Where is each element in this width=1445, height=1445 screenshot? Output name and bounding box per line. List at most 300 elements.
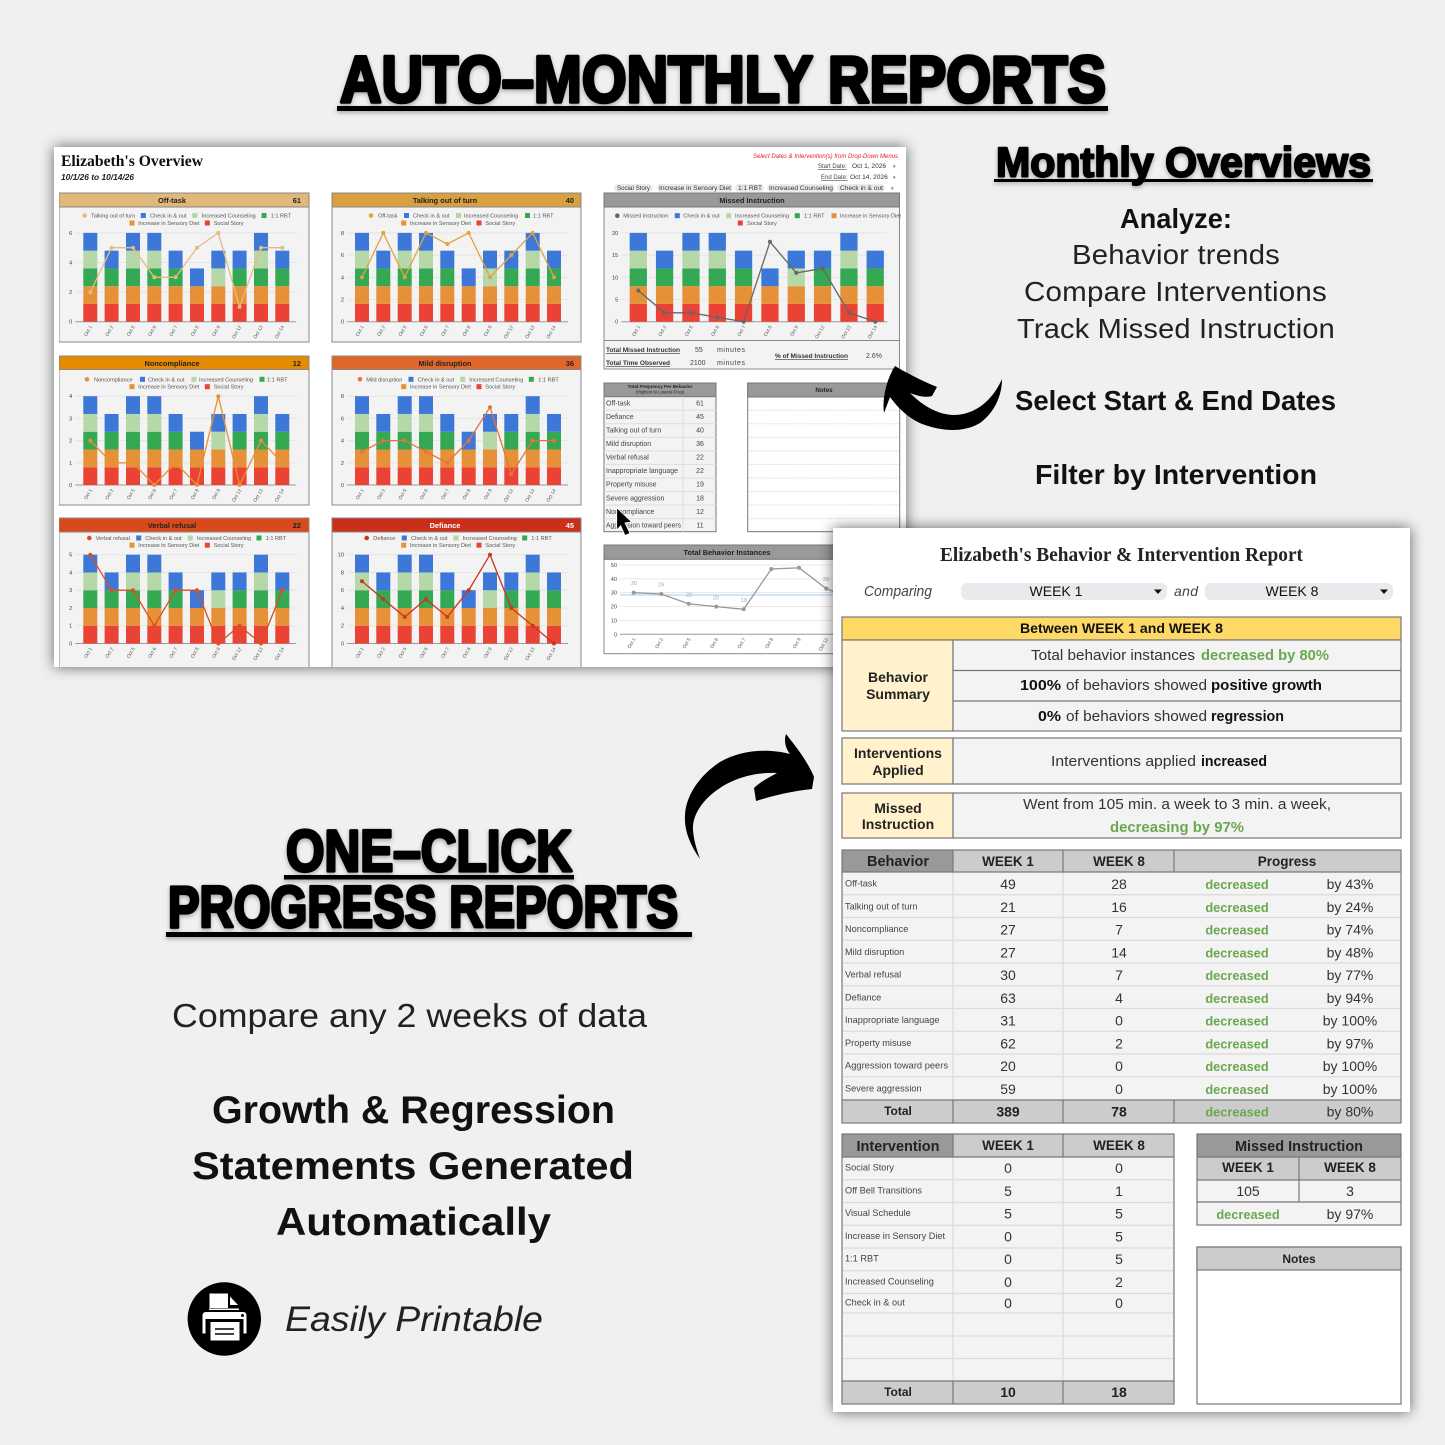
text: compare any 2 weeks: Compare any 2 weeks of data	[172, 997, 648, 1034]
text: filter by intervention: Filter by Intervention	[1035, 459, 1317, 490]
chart: total behavior instances	[604, 544, 833, 654]
date and intervention selectors: Check in & out	[840, 185, 883, 192]
table: behavior comparison: 62	[1000, 1035, 1016, 1051]
chart: defiance: Increased Counseling	[463, 536, 517, 542]
chart: talking out of turn: Talking out of turn	[413, 196, 478, 205]
chart: talking out of turn: Check in & out	[413, 214, 450, 220]
chart: defiance: Oct 7	[440, 646, 451, 659]
table: behavior comparison: 0	[1115, 1012, 1123, 1028]
table: behavior comparison: 16	[1111, 899, 1127, 915]
summary: interventions applied: Interventions	[854, 745, 942, 761]
table: behavior comparison: 21	[1000, 899, 1016, 915]
table: total frequency per behavior: Talking out of turn	[606, 428, 661, 434]
table: behavior comparison: 78	[1111, 1104, 1127, 1120]
chart: mild disruption: Increased Counseling	[469, 377, 523, 383]
table: behavior comparison: Total	[884, 1104, 912, 1118]
date and intervention selectors: ▾	[893, 164, 896, 170]
chart: noncompliance: Noncompliance	[144, 359, 200, 368]
chart: noncompliance	[59, 356, 309, 505]
missed instruction totals: Total Time Observed	[606, 360, 670, 367]
chart: missed instruction: Oct 13	[840, 324, 853, 340]
chart: talking out of turn: 6	[341, 253, 344, 259]
chart: defiance: Check in & out	[411, 536, 448, 542]
table: intervention comparison: Off Bell Transitions	[845, 1185, 922, 1195]
chart: talking out of turn: 4	[341, 275, 344, 281]
chart: mild disruption: Oct 5	[398, 488, 409, 501]
table: behavior comparison: by 100%	[1323, 1012, 1377, 1028]
table: behavior comparison: Inappropriate language	[845, 1015, 940, 1025]
table: total frequency per behavior: (Highest to Lowest Freq)	[636, 390, 685, 394]
chart: talking out of turn: 8	[341, 231, 344, 237]
chart: defiance: Oct 14	[545, 646, 558, 662]
chart: defiance: Oct 13	[524, 646, 537, 662]
summary: behavior summary: Behavior	[868, 669, 929, 685]
summary: behavior summary: 100%	[1020, 678, 1061, 694]
table: intervention comparison: 18	[1111, 1384, 1127, 1400]
chart: defiance	[332, 518, 581, 673]
chart: verbal refusal: Oct 1	[83, 646, 94, 659]
table: intervention comparison: 5	[1115, 1206, 1123, 1222]
table: behavior comparison: decreased	[1205, 945, 1269, 960]
date and intervention selectors: Start Date:	[818, 164, 847, 170]
missed instruction totals: 55	[695, 347, 703, 354]
chart: total behavior instances: 22	[686, 592, 692, 598]
date and intervention selectors: Oct 1, 2026	[852, 163, 886, 170]
table: total frequency per behavior: 19	[696, 482, 704, 489]
chart: mild disruption: 0	[341, 483, 344, 489]
chart: noncompliance: Check in & out	[148, 377, 185, 383]
chart: off-task	[59, 193, 309, 342]
chart: noncompliance: Oct 2	[104, 488, 115, 501]
week selectors: WEEK 1	[1030, 583, 1083, 599]
chart: verbal refusal: 2	[69, 606, 72, 612]
table: intervention comparison: 0	[1004, 1295, 1012, 1311]
chart: missed instruction: Oct 2	[657, 324, 668, 338]
chart: missed instruction: 1:1 RBT	[804, 214, 825, 220]
chart: off-task: Oct 8	[190, 324, 201, 338]
chart: off-task: 61	[293, 196, 301, 205]
chart: defiance: 8	[341, 570, 344, 576]
table: total frequency per behavior: 40	[696, 428, 704, 434]
date and intervention selectors: Increase in Sensory Diet	[659, 185, 731, 192]
table: intervention comparison: 10	[1000, 1384, 1016, 1400]
chart: talking out of turn: Oct 1	[355, 324, 366, 338]
notes box	[748, 383, 900, 532]
table: total frequency per behavior: Noncompliance	[606, 509, 654, 516]
chart: defiance: Defiance	[373, 536, 395, 542]
chart: missed instruction: Missed Instruction	[623, 214, 668, 220]
chart: off-task: 2	[69, 290, 72, 296]
table: behavior comparison: 30	[1000, 967, 1016, 983]
table: total frequency per behavior: Mild disruption	[606, 441, 651, 448]
table: behavior comparison: decreased	[1205, 877, 1269, 892]
date range: 10/1/26 to 10/14/26	[61, 173, 135, 182]
table: behavior comparison: by 48%	[1327, 944, 1373, 960]
table: intervention comparison: 0	[1115, 1160, 1123, 1176]
text: analyze list: Behavior trends	[1072, 239, 1280, 270]
chart: talking out of turn: Oct 7	[440, 324, 451, 338]
chart: off-task: Oct 6	[147, 324, 158, 338]
table: behavior comparison: decreased	[1205, 1059, 1269, 1074]
chart: off-task: Oct 9	[211, 324, 222, 338]
chart: off-task: 4	[69, 260, 72, 266]
chart: mild disruption: Oct 2	[376, 488, 387, 501]
table: intervention comparison: Increased Counseling	[845, 1276, 934, 1286]
chart: defiance: 0	[341, 642, 344, 648]
summary: interventions applied	[842, 738, 1401, 784]
text: growth and regression statements: Statements Generated	[192, 1145, 634, 1188]
table: intervention comparison: 0	[1004, 1274, 1012, 1290]
report notes box	[1197, 1247, 1401, 1404]
chart: missed instruction: 10	[612, 275, 618, 281]
chart: off-task: 6	[69, 231, 72, 237]
chart: off-task: Increase in Sensory Diet	[138, 221, 200, 227]
chart: total behavior instances: Oct 12	[818, 637, 830, 652]
table: missed instruction comparison	[1197, 1134, 1401, 1225]
chart: verbal refusal: Oct 7	[168, 646, 179, 659]
chart: total behavior instances: Oct 6	[709, 637, 720, 650]
table: behavior comparison: 27	[1000, 944, 1016, 960]
chart: mild disruption: 2	[341, 461, 344, 467]
table: total frequency per behavior: Verbal refusal	[606, 455, 649, 462]
table: behavior comparison: decreased	[1205, 991, 1269, 1006]
table: behavior comparison: 31	[1000, 1012, 1016, 1028]
chart: defiance: Oct 5	[398, 646, 409, 659]
table: behavior comparison: 0	[1115, 1081, 1123, 1097]
summary: behavior summary: positive growth	[1211, 678, 1322, 694]
chart: mild disruption: Check in & out	[418, 377, 455, 383]
table: behavior comparison: decreased	[1205, 1082, 1269, 1097]
chart: talking out of turn: Oct 8	[462, 324, 473, 338]
chart: verbal refusal: 0	[69, 642, 72, 648]
chart: defiance: Oct 8	[462, 646, 473, 659]
table: total frequency per behavior: Defiance	[606, 414, 634, 421]
chart: verbal refusal: Increased Counseling	[197, 536, 251, 542]
chart: mild disruption: 36	[566, 359, 574, 368]
chart: verbal refusal: 4	[69, 570, 72, 576]
table: intervention comparison: Total	[884, 1385, 912, 1399]
chart: verbal refusal: 22	[293, 521, 301, 530]
chart: talking out of turn: Social Story	[485, 221, 515, 227]
chart: defiance: Increase in Sensory Diet	[410, 543, 471, 549]
missed instruction totals: 2.6%	[866, 353, 882, 360]
arrow: to progress report	[685, 734, 814, 859]
table: behavior comparison: Behavior	[867, 854, 929, 870]
text: easily printable: Easily Printable	[285, 1300, 543, 1339]
table: behavior comparison: 63	[1000, 990, 1016, 1006]
table: behavior comparison: Mild disruption	[845, 947, 904, 957]
chart: noncompliance: Oct 6	[147, 488, 158, 501]
chart: mild disruption: Oct 8	[462, 488, 473, 501]
table: behavior comparison: Noncompliance	[845, 924, 908, 934]
chart: noncompliance: 1	[69, 461, 72, 467]
chart: missed instruction	[604, 193, 901, 369]
table: behavior comparison: Aggression toward peers	[845, 1060, 948, 1070]
chart: verbal refusal: Oct 5	[126, 646, 137, 659]
table: intervention comparison: 1:1 RBT	[845, 1254, 879, 1264]
chart: total behavior instances: Oct 8	[764, 637, 775, 650]
table: missed instruction comparison: 3	[1346, 1183, 1354, 1199]
chart: total behavior instances: Oct 2	[654, 637, 665, 650]
summary: behavior summary	[842, 617, 1401, 731]
chart: talking out of turn: Oct 9	[483, 324, 494, 338]
icon: mouse cursor	[617, 508, 632, 536]
table: total frequency per behavior: Aggression toward peers	[606, 522, 681, 529]
chart: mild disruption: Mild disruption	[419, 359, 472, 368]
table: intervention comparison: WEEK 8	[1093, 1138, 1145, 1153]
table: intervention comparison: 5	[1004, 1206, 1012, 1222]
summary: behavior summary: decreased by 80%	[1201, 648, 1329, 664]
chart: defiance: Oct 6	[419, 646, 430, 659]
chart: off-task: Oct 13	[252, 324, 265, 340]
table: behavior comparison: by 77%	[1327, 967, 1373, 983]
table: behavior comparison: 2	[1115, 1035, 1123, 1051]
table: missed instruction comparison: WEEK 8	[1324, 1160, 1376, 1175]
chart: verbal refusal: Check in & out	[145, 536, 182, 542]
table: missed instruction comparison: by 97%	[1327, 1206, 1373, 1222]
summary: interventions applied: Interventions applied	[1051, 754, 1196, 770]
summary: behavior summary: Summary	[866, 686, 930, 702]
notes box: Notes	[815, 387, 833, 394]
table: behavior comparison: decreased	[1205, 900, 1269, 915]
chart: talking out of turn: Oct 14	[545, 324, 558, 340]
overview title: Elizabeth's Overview	[61, 153, 204, 170]
chart: mild disruption: Mild disruption	[366, 377, 402, 383]
chart: missed instruction: Oct 7	[736, 324, 747, 338]
chart: talking out of turn: Oct 12	[503, 324, 515, 340]
panel: monthly overview sheet	[54, 147, 906, 673]
chart: missed instruction: Oct 9	[789, 324, 800, 338]
chart: total behavior instances: Oct 1	[627, 637, 638, 650]
table: intervention comparison: 2	[1115, 1274, 1123, 1290]
chart: verbal refusal: Increase in Sensory Diet	[138, 543, 200, 549]
date and intervention selectors	[614, 154, 898, 192]
missed instruction totals: % of Missed Instruction	[775, 353, 848, 360]
chart: noncompliance: Oct 9	[211, 488, 222, 501]
table: behavior comparison: decreased	[1205, 1014, 1269, 1028]
table: total frequency per behavior: 36	[696, 441, 704, 448]
chart: mild disruption: Oct 6	[419, 488, 430, 501]
chart: verbal refusal: Social Story	[214, 543, 244, 549]
icon: printer	[188, 1282, 261, 1356]
missed instruction totals: Total Missed Instruction	[606, 347, 680, 354]
text: select start and end dates: Select Start & End Dates	[1015, 385, 1336, 416]
summary: behavior summary: 0%	[1038, 709, 1061, 725]
arrow: to missed instruction	[883, 366, 1002, 430]
summary: missed instruction	[842, 793, 1401, 838]
chart: noncompliance: Social Story	[214, 385, 244, 391]
date and intervention selectors: ▾	[891, 186, 894, 192]
chart: defiance: 4	[341, 606, 344, 612]
chart: total behavior instances: 10	[611, 618, 617, 624]
chart: noncompliance: Oct 8	[190, 488, 201, 501]
table: intervention comparison: Social Story	[845, 1162, 894, 1172]
chart: mild disruption: Oct 7	[440, 488, 451, 501]
chart: talking out of turn: 40	[566, 196, 574, 205]
text: growth and regression statements: Growth & Regression	[212, 1089, 615, 1132]
text: analyze list: Track Missed Instruction	[1017, 313, 1335, 344]
chart: off-task: Increased Counseling	[202, 214, 256, 220]
chart: missed instruction: Missed Instruction	[719, 196, 785, 205]
chart: total behavior instances: 50	[611, 563, 617, 569]
chart: talking out of turn: Oct 2	[376, 324, 387, 338]
chart: verbal refusal: Verbal refusal	[96, 536, 130, 542]
summary: missed instruction: Went from 105 min. a week to 3 min. a week,	[1023, 797, 1331, 813]
chart: mild disruption: Social Story	[485, 385, 515, 391]
summary: behavior summary: of behaviors showed	[1066, 709, 1207, 725]
chart: off-task: Oct 7	[168, 324, 179, 338]
chart: noncompliance: 2	[69, 439, 72, 445]
table: behavior comparison: 0	[1115, 1058, 1123, 1074]
date and intervention selectors: ▾	[893, 175, 896, 181]
table: behavior comparison: Property misuse	[845, 1038, 911, 1048]
chart: off-task: Check in & out	[150, 214, 187, 220]
table: behavior comparison: by 100%	[1323, 1081, 1377, 1097]
table: total frequency per behavior: 45	[696, 414, 704, 421]
chart: noncompliance: 0	[69, 483, 72, 489]
table: total frequency per behavior: Inappropriate language	[606, 468, 678, 475]
week selectors: WEEK 8	[1266, 583, 1319, 599]
chart: off-task: Off-task	[158, 196, 187, 205]
week selectors	[864, 583, 1393, 600]
table: total frequency per behavior: Severe aggression	[606, 495, 664, 502]
chart: defiance: 6	[341, 588, 344, 594]
chart: off-task: 0	[69, 320, 72, 326]
chart: total behavior instances: Oct 7	[737, 637, 748, 650]
date and intervention selectors: Select Dates & Intervention(s) from Drop-Down Menus	[753, 154, 898, 160]
chart: verbal refusal: 3	[69, 588, 72, 594]
heading: one-click progress reports	[166, 819, 692, 940]
table: intervention comparison: 0	[1004, 1160, 1012, 1176]
chart: missed instruction: 5	[615, 297, 618, 303]
text: growth and regression statements: Automatically	[276, 1201, 551, 1244]
chart: mild disruption: Oct 14	[545, 488, 558, 503]
table: behavior comparison: Talking out of turn	[845, 901, 918, 911]
chart: missed instruction: 20	[612, 231, 618, 237]
chart: mild disruption: Increase in Sensory Diet	[410, 385, 471, 391]
chart: mild disruption: Oct 9	[483, 488, 494, 501]
table: behavior comparison: 14	[1111, 944, 1127, 960]
table: behavior comparison: 7	[1115, 967, 1123, 983]
table: behavior comparison	[842, 850, 1401, 1123]
chart: missed instruction: Oct 12	[814, 324, 826, 340]
chart: verbal refusal	[59, 518, 309, 673]
table: behavior comparison: 4	[1115, 990, 1123, 1006]
summary: behavior summary: of behaviors showed	[1066, 678, 1207, 694]
chart: verbal refusal: 1:1 RBT	[266, 536, 287, 542]
chart: total behavior instances: Oct 9	[792, 637, 803, 650]
chart: off-task: Oct 2	[104, 324, 115, 338]
chart: off-task: Oct 5	[126, 324, 137, 338]
table: behavior comparison: 27	[1000, 922, 1016, 938]
chart: total behavior instances: Oct 5	[682, 637, 693, 650]
chart: missed instruction: Oct 5	[684, 324, 695, 338]
date and intervention selectors: Oct 14, 2026	[850, 174, 888, 181]
chart: mild disruption: 4	[341, 439, 344, 445]
chart: verbal refusal: Oct 9	[211, 646, 222, 659]
table: missed instruction comparison: WEEK 1	[1222, 1160, 1274, 1175]
chart: total behavior instances: 29	[658, 582, 664, 588]
chart: talking out of turn: Off-task	[378, 214, 398, 220]
table: total frequency per behavior: 22	[696, 468, 704, 475]
table: behavior comparison: Progress	[1258, 854, 1316, 869]
table: behavior comparison: decreased	[1205, 1104, 1269, 1120]
table: intervention comparison: Intervention	[857, 1139, 939, 1155]
summary: behavior summary: Between WEEK 1 and WEEK 8	[1020, 620, 1223, 636]
table: behavior comparison: Off-task	[845, 878, 877, 888]
summary: missed instruction: decreasing by 97%	[1110, 820, 1244, 836]
table: total frequency per behavior: 61	[696, 400, 704, 407]
table: behavior comparison: by 74%	[1327, 922, 1373, 938]
chart: total behavior instances: Total Behavior Instances	[684, 548, 770, 557]
chart: missed instruction: Check in & out	[683, 214, 720, 220]
table: behavior comparison: 49	[1000, 876, 1016, 892]
chart: total behavior instances: 30	[631, 581, 637, 587]
chart: verbal refusal: Oct 2	[104, 646, 115, 659]
chart: noncompliance: Oct 5	[126, 488, 137, 501]
chart: off-task: Social Story	[214, 221, 244, 227]
chart: talking out of turn: Oct 13	[524, 324, 537, 340]
chart: total behavior instances: 40	[611, 577, 617, 583]
chart: noncompliance: 3	[69, 416, 72, 422]
chart: noncompliance: 1:1 RBT	[267, 377, 288, 383]
chart: verbal refusal: Oct 14	[274, 646, 286, 662]
table: intervention comparison: 0	[1004, 1228, 1012, 1244]
heading: one-click progress reports: ONE–CLICK	[286, 819, 572, 884]
chart: verbal refusal: Verbal refusal	[148, 521, 196, 530]
chart: defiance: Oct 12	[503, 646, 515, 662]
chart: noncompliance: 4	[69, 394, 72, 400]
table: intervention comparison: 5	[1115, 1228, 1123, 1244]
chart: defiance: Oct 9	[483, 646, 494, 659]
chart: verbal refusal: Oct 6	[147, 646, 158, 659]
chart: total behavior instances: 0	[614, 632, 617, 638]
text: analyze list: Analyze:	[1120, 203, 1232, 234]
table: behavior comparison: Verbal refusal	[845, 970, 901, 980]
table: behavior comparison: 28	[1111, 876, 1127, 892]
summary: interventions applied: Applied	[872, 762, 924, 778]
table: behavior comparison: by 43%	[1327, 876, 1373, 892]
table: behavior comparison: 7	[1115, 922, 1123, 938]
chart: missed instruction: Oct 8	[763, 324, 774, 338]
report notes box: Notes	[1282, 1252, 1316, 1266]
chart: talking out of turn: 0	[341, 320, 344, 326]
chart: verbal refusal: 5	[69, 553, 72, 559]
table: behavior comparison: by 24%	[1327, 899, 1373, 915]
table: behavior comparison: by 97%	[1327, 1035, 1373, 1051]
table: intervention comparison: Check in & out	[845, 1298, 905, 1308]
table: total frequency per behavior: Total Frequency Per Behavior	[628, 384, 693, 389]
chart: noncompliance: Increase in Sensory Diet	[138, 385, 200, 391]
chart: defiance: 45	[566, 521, 574, 530]
table: behavior comparison: decreased	[1205, 968, 1269, 983]
table: intervention comparison: Visual Schedule	[845, 1208, 911, 1218]
table: total frequency per behavior: 12	[696, 509, 704, 516]
chart: verbal refusal: Oct 13	[252, 646, 265, 662]
table: behavior comparison: decreased	[1205, 1036, 1269, 1051]
table: behavior comparison: 389	[996, 1104, 1020, 1120]
date and intervention selectors: Social Story	[617, 185, 651, 192]
table: intervention comparison: 1	[1115, 1183, 1123, 1199]
chart: mild disruption: Oct 1	[355, 488, 366, 501]
chart: verbal refusal: 1	[69, 624, 72, 630]
chart: defiance: Oct 2	[376, 646, 387, 659]
chart: missed instruction: 0	[615, 320, 618, 326]
chart: total behavior instances: 30	[611, 591, 617, 597]
chart: missed instruction: Increased Counseling	[735, 214, 789, 220]
chart: missed instruction: Oct 1	[631, 324, 642, 338]
chart: defiance: Oct 1	[355, 646, 366, 659]
